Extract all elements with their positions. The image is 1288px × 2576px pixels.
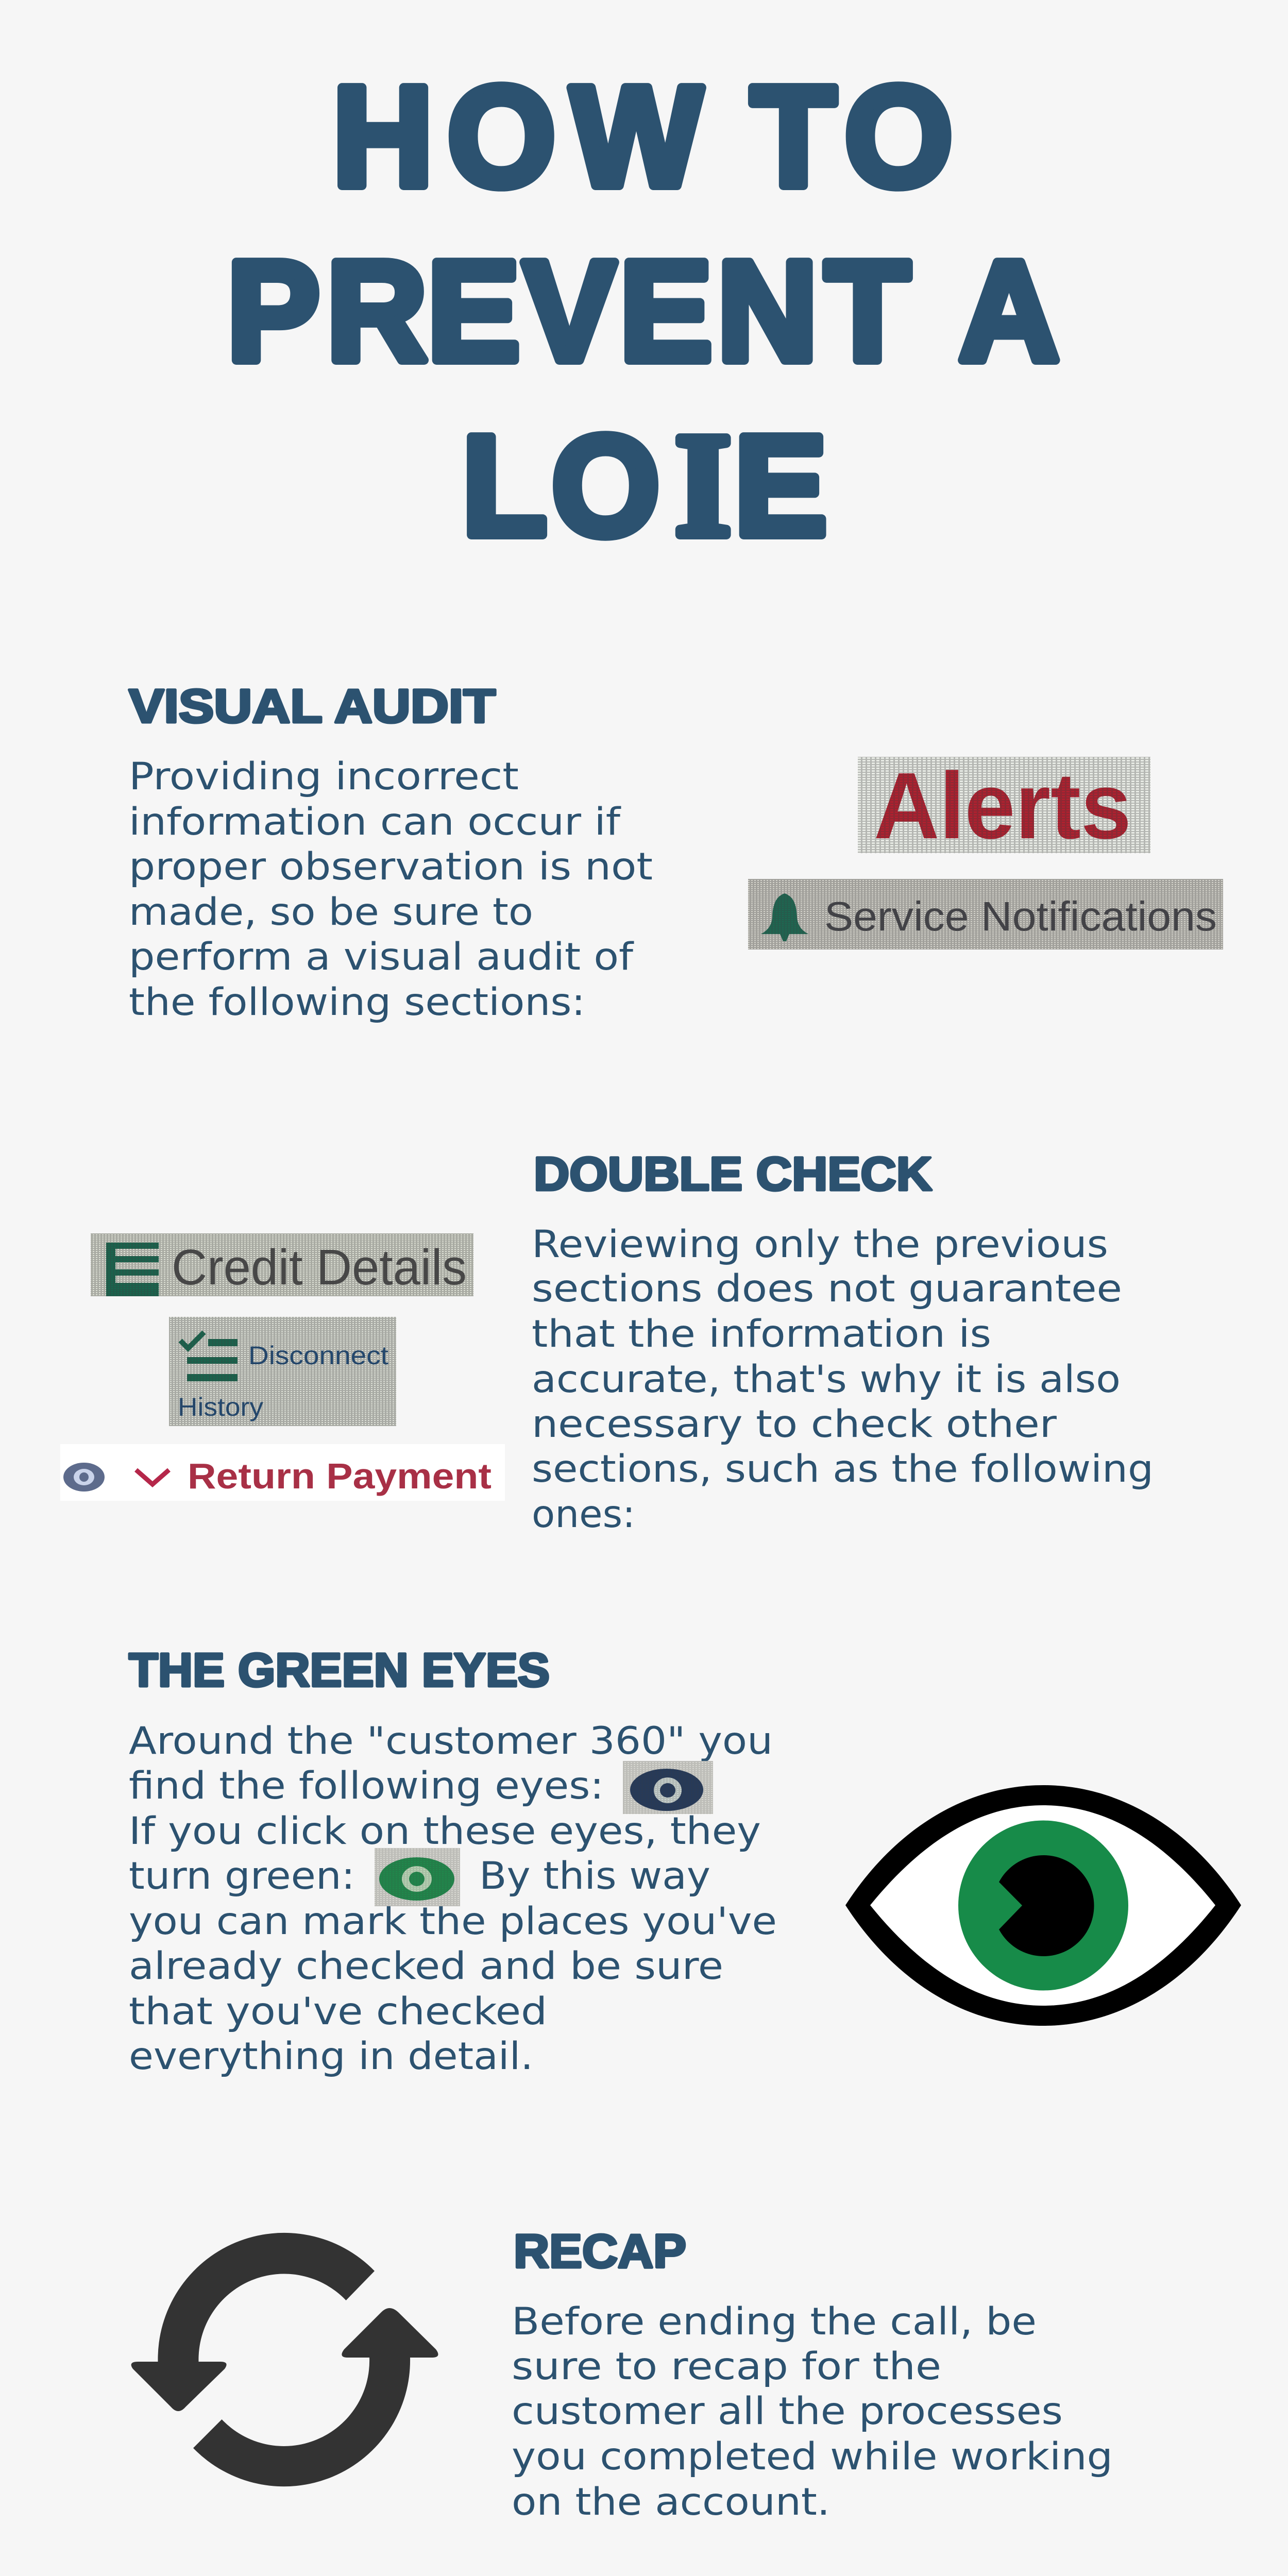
text block: recap: you completed while working [512,2435,1113,2479]
text block: the green eyes: By this way [479,1854,710,1898]
panel: the green eyes [129,1644,1241,2078]
text block: double check [532,1223,1154,1536]
screenshot: return payment: Return Payment [188,1456,492,1496]
title: I [675,403,731,567]
text block: double check: sections, such as the following [532,1447,1154,1491]
text block: visual audit [129,755,653,1024]
text block: the green eyes: turn green: [129,1854,355,1898]
title [227,57,1059,567]
heading: the green eyes: THE GREEN EYES [129,1644,550,1697]
screenshot: service notifications: Service Notifications [824,893,1217,939]
text block: the green eyes: Around the "customer 360" you [129,1719,773,1763]
text block: recap [512,2300,1113,2524]
text block: double check: accurate, that's why it is also [532,1358,1121,1401]
screenshot: alerts: Alerts [874,753,1131,858]
title: HOW TO [333,57,953,216]
heading: recap: RECAP [514,2225,686,2278]
text block: visual audit: the following sections: [129,980,585,1024]
text block: visual audit: perform a visual audit of [129,935,635,979]
text block: the green eyes: that you've checked [129,1990,547,2033]
screenshot: disconnect history [169,1317,396,1426]
icon: grey eye screenshot [623,1761,713,1814]
panel: double check [60,1148,1154,1536]
text block: double check: ones: [532,1493,635,1536]
text block: visual audit: made, so be sure to [129,890,533,934]
text block: recap: sure to recap for the [512,2345,941,2388]
text block: recap: on the account. [512,2480,830,2524]
text block: visual audit: Providing incorrect [129,755,519,799]
text block: the green eyes [129,1719,777,2078]
text block: the green eyes: everything in detail. [129,2035,533,2078]
text block: double check: Reviewing only the previous [532,1223,1108,1266]
text block: visual audit: proper observation is not [129,845,653,889]
icon: green eye screenshot [375,1848,460,1906]
screenshot: disconnect history: Disconnect [248,1341,388,1370]
text block: the green eyes: you can mark the places you've [129,1900,777,1943]
panel: visual audit [129,680,1223,1024]
text block: recap: customer all the processes [512,2389,1063,2433]
text block: the green eyes: already checked and be sure [129,1944,723,1988]
title: PREVENT A [227,231,1059,391]
text block: double check: that the information is [532,1312,991,1356]
icon: big green eye [845,1785,1241,2026]
screenshot: disconnect history: History [178,1393,263,1421]
screenshot: service notifications [748,879,1223,950]
text block: visual audit: information can occur if [129,800,622,844]
screenshot: credit details: Credit Details [172,1239,467,1295]
icon: refresh arrows [131,2233,438,2486]
text block: the green eyes: find the following eyes: [129,1764,604,1808]
text block: double check: necessary to check other [532,1402,1057,1446]
text block: the green eyes: If you click on these eyes, they [129,1809,761,1853]
title: LO [462,406,660,565]
text block: double check: sections does not guarantee [532,1267,1122,1311]
heading: double check: DOUBLE CHECK [534,1148,932,1200]
title: E [734,406,827,565]
screenshot: return payment [60,1444,505,1501]
text block: recap: Before ending the call, be [512,2300,1037,2344]
heading: visual audit: VISUAL AUDIT [129,680,496,733]
panel: recap [131,2225,1113,2524]
